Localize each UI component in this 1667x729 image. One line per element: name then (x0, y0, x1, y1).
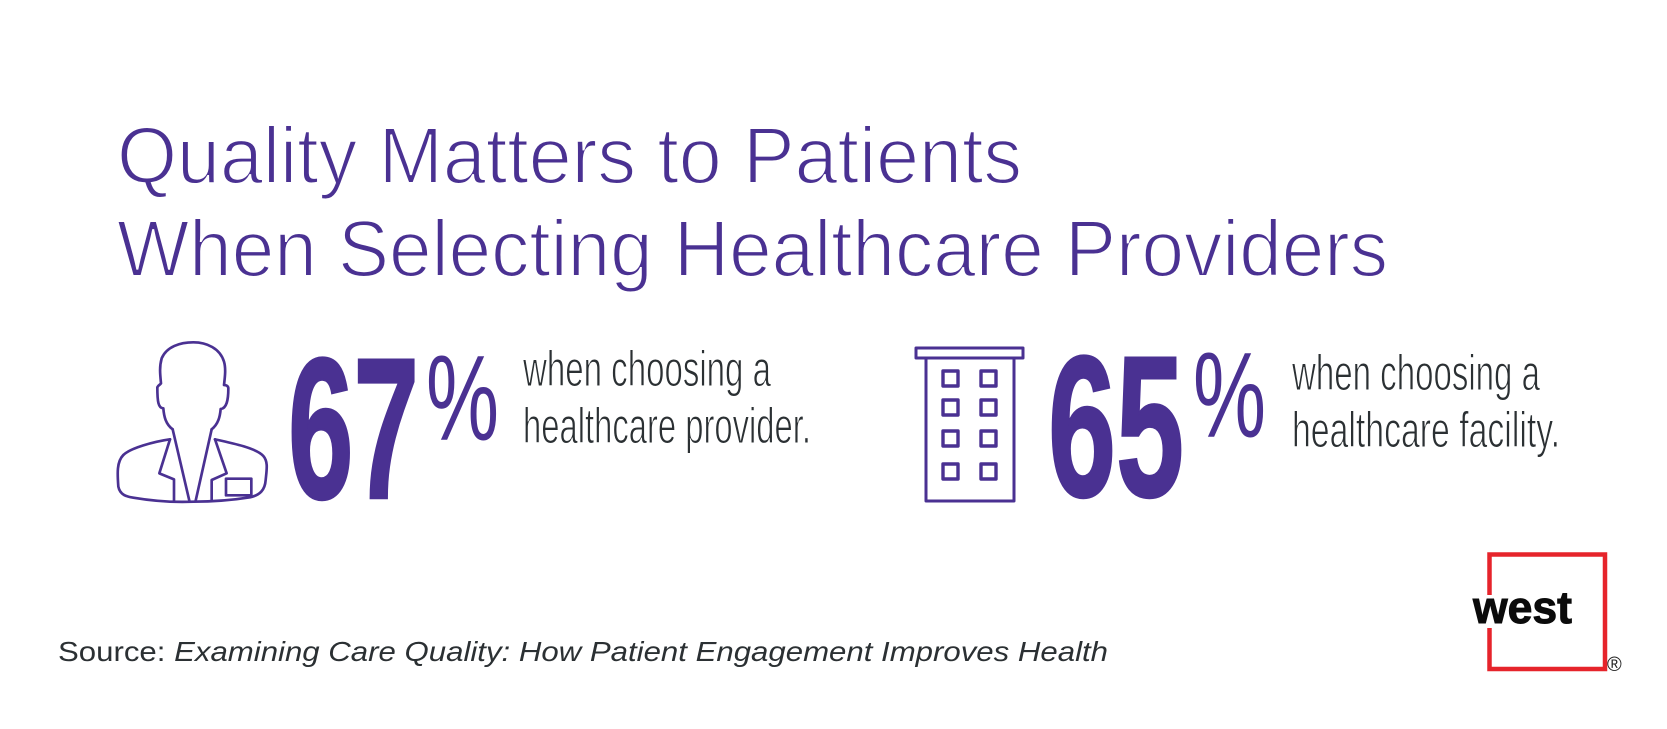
icon: doctor (118, 342, 267, 502)
logo: west (1472, 554, 1622, 676)
logo: west: ® (1607, 654, 1622, 676)
label: provider: when choosing a (522, 341, 771, 397)
stat: percent sign: % (426, 330, 499, 466)
stat: 67: 67 (288, 316, 419, 541)
logo: west: west (1472, 582, 1572, 633)
title: Quality Matters to Patients (117, 111, 1022, 200)
label: facility: when choosing a (1291, 345, 1540, 401)
label: facility (1291, 345, 1560, 458)
title (117, 111, 1388, 293)
stat: 65: 65 (1048, 314, 1184, 539)
label: provider (522, 341, 811, 454)
icon: building (916, 348, 1023, 501)
stat: percent sign: % (1193, 327, 1266, 463)
label: provider: healthcare provider. (523, 398, 811, 454)
panel: healthcare provider statistic (118, 316, 811, 541)
panel: healthcare facility statistic (916, 314, 1560, 539)
source note: Source: Examining Care Quality: How Patient Engagement Improves Health (58, 636, 1108, 667)
title: When Selecting Healthcare Providers (117, 204, 1388, 293)
